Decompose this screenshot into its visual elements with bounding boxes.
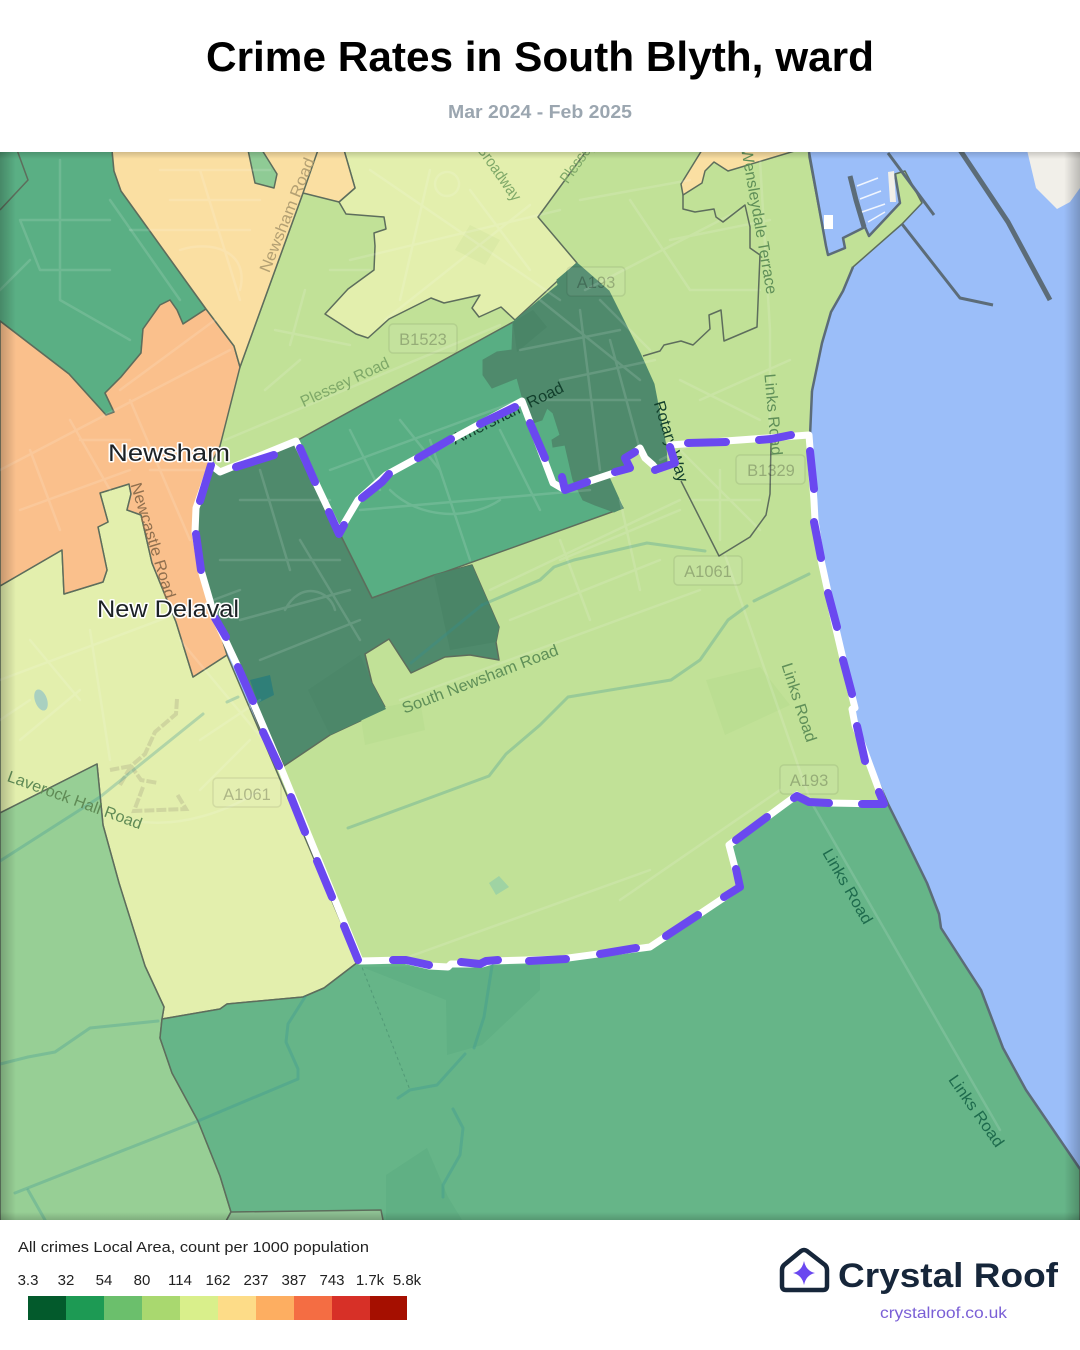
streams [0,543,809,1220]
region: pale orange [112,150,355,367]
legend tick labels: 32 [58,1272,74,1289]
region: dark green north [483,263,667,512]
region: dark green west [195,441,499,766]
coastline and piers [809,150,1080,1169]
legend tick labels: 3.3 [18,1272,38,1289]
region: residential yellow-green north [325,150,587,338]
road labels: Newsham Road [257,156,319,275]
road labels: Links Road [945,1072,1007,1151]
road labels: Links Road [778,661,819,744]
legend tick labels: 387 [281,1272,307,1289]
legend tick labels: 1.7k [356,1272,385,1289]
legend tick labels: 743 [319,1272,345,1289]
road labels: Plessey Road [298,355,392,411]
legend tick labels: 162 [205,1272,231,1289]
road labels: South Newsham Road [400,642,561,717]
road shields: A1061 [684,563,732,581]
region: left green fields [0,764,231,1225]
ward boundary [195,401,884,967]
road shields: B1329 [747,462,795,480]
road labels: Links Road [760,373,785,456]
road shields: B1523 [399,331,447,349]
subtitle: date range: Mar 2024 - Feb 2025 [448,102,632,122]
road shields: A193 [577,274,615,292]
road shields: A1061 [223,786,271,804]
legend colour scale [28,1296,407,1320]
legend tick labels: 237 [243,1272,269,1289]
region: light green land and ward base [200,140,922,980]
region: bottom strip [226,1209,384,1220]
title: Crime Rates in South Blyth, ward [206,33,874,80]
boundary lines [0,150,771,556]
place label: New Delaval: New Delaval [97,596,239,623]
road labels: Broadway [473,142,524,205]
street network [0,160,1000,1130]
road shields [213,267,838,807]
region: orange [0,300,240,677]
white base line [195,401,884,967]
icon: house with star [782,1250,827,1290]
legend title: All crimes Local Area, count per 1000 population [18,1239,369,1256]
region: yellow-green west [0,484,358,1019]
road labels: Wensleydale Terrace [737,147,780,296]
legend tick labels: 80 [134,1272,150,1289]
legend tick labels [18,1272,422,1289]
road labels: Newcastle Road [127,481,178,601]
region: mid green in ward [296,322,623,598]
logo wordmark: Crystal Roof [838,1257,1059,1295]
legend tick labels: 5.8k [393,1272,422,1289]
road labels: Links Road [819,846,875,927]
region: upper-left green [0,150,206,415]
road labels: Amersham Road [449,380,567,448]
region: pale orange sliver at the top [681,150,798,195]
road labels: Laverock Hall Road [5,769,144,833]
region: small green patch [248,150,277,188]
region: south green [160,795,1080,1225]
legend tick labels: 54 [96,1272,112,1289]
darker patches [513,310,547,352]
website: crystalroof.co.uk [880,1305,1008,1322]
logo: Crystal Roof [782,1250,1059,1322]
place label: Newsham: Newsham [108,440,230,467]
road shields: A193 [790,772,828,790]
legend [18,1239,422,1320]
marina details [824,150,1080,229]
road labels: Rotary Way [650,399,691,484]
purple dashes [196,407,884,965]
legend tick labels: 114 [168,1272,192,1289]
road labels: Plessey Road [557,108,619,187]
road labels [5,108,1007,1151]
